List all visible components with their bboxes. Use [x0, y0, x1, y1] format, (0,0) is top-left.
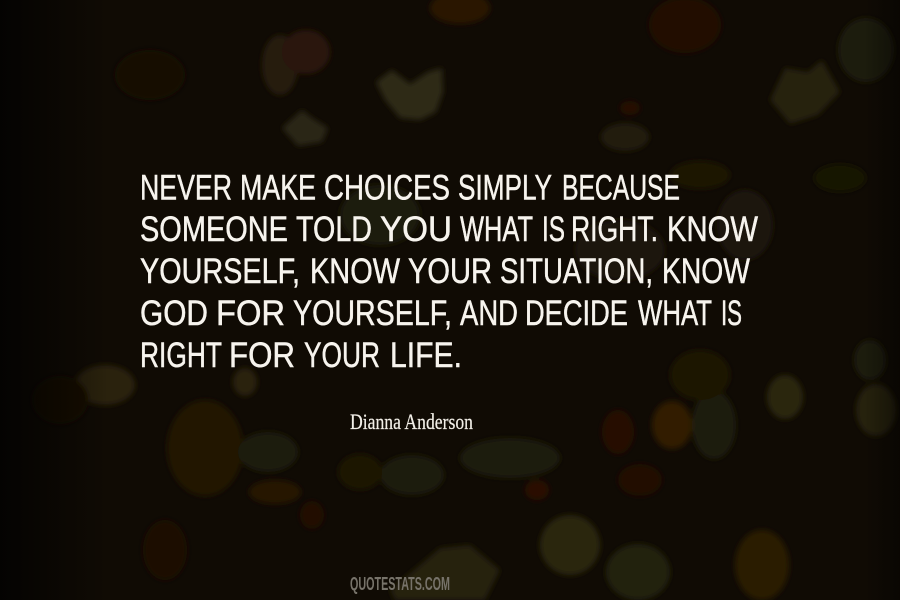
quote line 3: YOUR [408, 251, 492, 291]
quote line 5: RIGHT [140, 335, 222, 375]
quote line 3: SITUATION, [500, 251, 653, 291]
quote line 2: TOLD [296, 209, 372, 249]
quote line 5: FOR [229, 335, 295, 375]
quote line 2: KNOW [667, 209, 758, 249]
quote line 2: YOU [380, 209, 452, 249]
quote line 2: IS [542, 209, 565, 249]
quote line 2: RIGHT. [571, 209, 658, 249]
quote line 4: WHAT [638, 293, 712, 333]
quote line 3: KNOW [662, 251, 750, 291]
quote line 1: MAKE [240, 168, 316, 208]
quote line 4: IS [721, 293, 742, 333]
quote line 5: LIFE. [390, 335, 462, 375]
quote line 1: BECAUSE [562, 168, 680, 208]
quote line 5: YOUR [304, 335, 380, 375]
quote line 4: AND [460, 293, 518, 333]
quote line 2: WHAT [460, 209, 533, 249]
quote line 1: SIMPLY [458, 168, 552, 208]
quote line 1: NEVER [140, 168, 232, 208]
quote text [140, 168, 758, 375]
watermark: QUOTESTATS.COM [350, 573, 450, 594]
quote line 3 [140, 251, 750, 291]
quote line 2: SOMEONE [140, 209, 288, 249]
author name: Dianna Anderson [350, 409, 473, 434]
quote line 4: GOD [140, 293, 208, 333]
quote line 3: YOURSELF, [140, 251, 300, 291]
quote line 5 [140, 335, 462, 375]
quote line 4: DECIDE [525, 293, 628, 333]
quote line 1: CHOICES [324, 168, 450, 208]
quote line 4: FOR [216, 293, 285, 333]
quote line 1 [140, 168, 680, 208]
quote line 4: YOURSELF, [293, 293, 452, 333]
quote line 4 [140, 293, 742, 333]
quote line 3: KNOW [310, 251, 400, 291]
quote line 2 [140, 209, 758, 249]
